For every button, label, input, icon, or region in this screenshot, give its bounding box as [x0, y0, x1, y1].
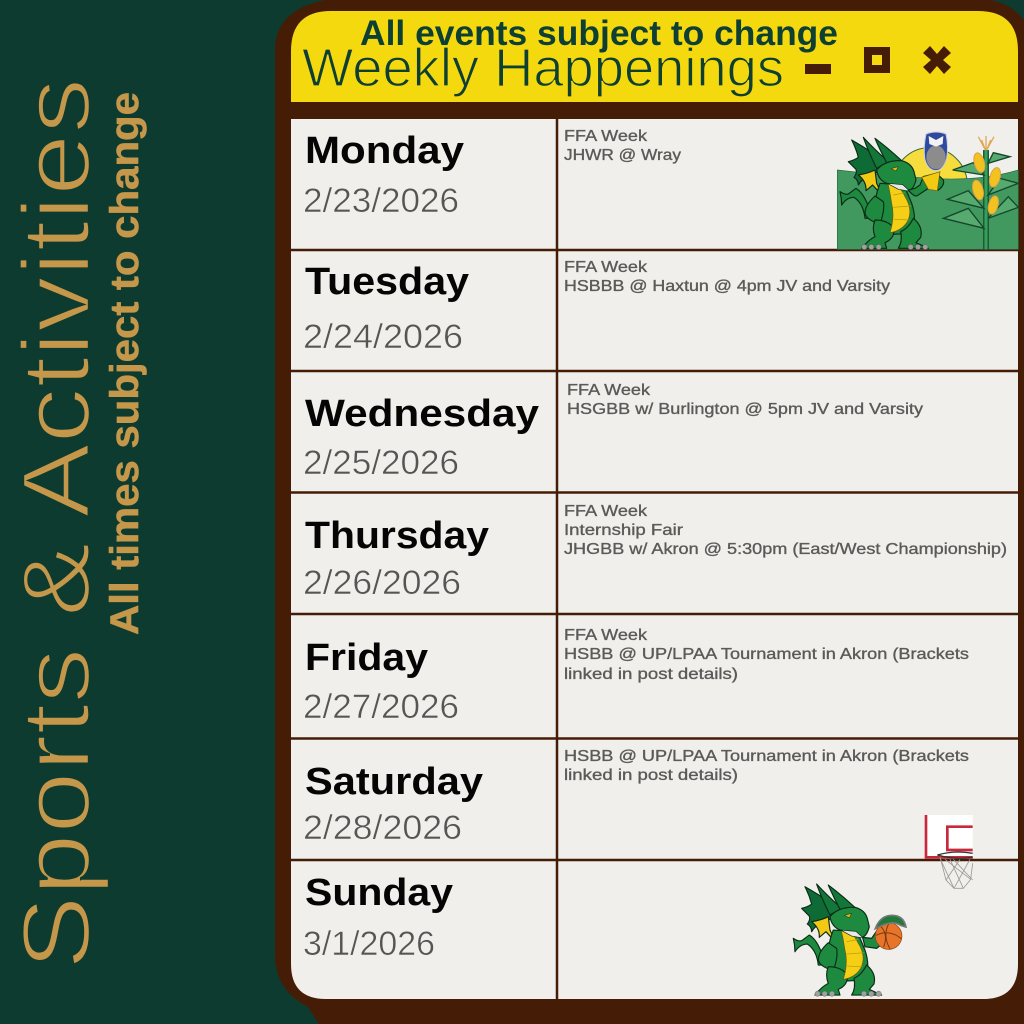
- row: Tuesday: [303, 259, 890, 356]
- row: Thursday: FFA Week: [564, 503, 648, 520]
- row: Saturday: linked in post details): [564, 767, 738, 784]
- row: Wednesday: 2/25/2026: [303, 444, 459, 482]
- row: Thursday: Internship Fair: [564, 522, 684, 539]
- row: Friday: 2/27/2026: [303, 688, 459, 726]
- schedule table: [291, 119, 1018, 999]
- row: Wednesday: HSGBB w/ Burlington @ 5pm JV and Varsity: [567, 401, 923, 418]
- row: Saturday: 2/28/2026: [303, 809, 462, 847]
- header notice: All events subject to change: [360, 14, 838, 53]
- row: Tuesday: HSBBB @ Haxtun @ 4pm JV and Varsity: [564, 278, 890, 295]
- illustration: FFA dragon with owl and corn: [837, 132, 1018, 250]
- row: Thursday: JHGBB w/ Akron @ 5:30pm (East/West Championship): [564, 541, 1007, 558]
- row: Thursday: Thursday: [305, 515, 489, 557]
- icon: maximize: [864, 47, 890, 73]
- row: Wednesday: Wednesday: [305, 393, 539, 435]
- window frame: [275, 0, 1024, 1024]
- header title: Weekly Happenings: [302, 38, 784, 98]
- row: Monday: Monday: [305, 130, 464, 172]
- row: Friday: Friday: [305, 637, 428, 679]
- header bar: [291, 11, 1018, 102]
- sidebar title: Sports & Activities: [3, 78, 110, 970]
- row: Monday: 2/23/2026: [303, 182, 459, 220]
- sidebar subtitle: All times subject to change: [103, 92, 147, 635]
- illustration: basketball hoop: [925, 815, 973, 888]
- row: Saturday: [303, 748, 969, 847]
- row: Wednesday: [303, 382, 923, 482]
- row: Sunday: Sunday: [305, 872, 453, 914]
- icon: minimize: [805, 64, 831, 74]
- row: Saturday: HSBB @ UP/LPAA Tournament in Akron (Brackets: [564, 748, 969, 765]
- row: Thursday: 2/26/2026: [303, 564, 461, 602]
- row: Friday: HSBB @ UP/LPAA Tournament in Akron (Brackets: [564, 646, 969, 663]
- row: Friday: FFA Week: [564, 627, 648, 644]
- row: Saturday: Saturday: [305, 761, 483, 803]
- row: Friday: [303, 627, 969, 726]
- row: Tuesday: Tuesday: [305, 261, 469, 303]
- icon: close: [923, 46, 951, 74]
- row: Friday: linked in post details): [564, 666, 738, 683]
- row: Wednesday: FFA Week: [567, 382, 651, 399]
- row: Monday: JHWR @ Wray: [564, 147, 681, 164]
- row: Tuesday: 2/24/2026: [303, 318, 463, 356]
- row: Monday: FFA Week: [564, 128, 648, 145]
- illustration: dragon with basketball: [793, 884, 906, 996]
- row: Monday: [303, 128, 681, 220]
- row: Tuesday: FFA Week: [564, 259, 648, 276]
- row: Sunday: [303, 872, 453, 963]
- row: Thursday: [303, 503, 1007, 602]
- row: Sunday: 3/1/2026: [303, 925, 435, 963]
